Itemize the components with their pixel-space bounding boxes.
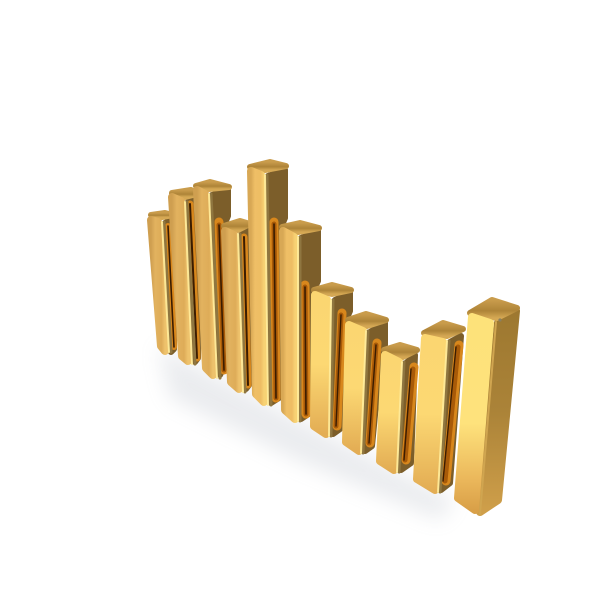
bar 9 (380, 345, 417, 472)
bar 3 (196, 182, 229, 378)
bar 6 (282, 223, 319, 421)
floor shadow (158, 345, 455, 520)
bar 4 (224, 221, 250, 392)
corner rivet (498, 318, 502, 322)
bar 2 (172, 190, 198, 364)
bar 1 (151, 213, 174, 352)
bar 8 (346, 314, 386, 453)
bar 7 (314, 285, 351, 436)
bar 11 (458, 300, 517, 514)
bar 5 (250, 162, 286, 405)
bar 10 (417, 323, 463, 492)
